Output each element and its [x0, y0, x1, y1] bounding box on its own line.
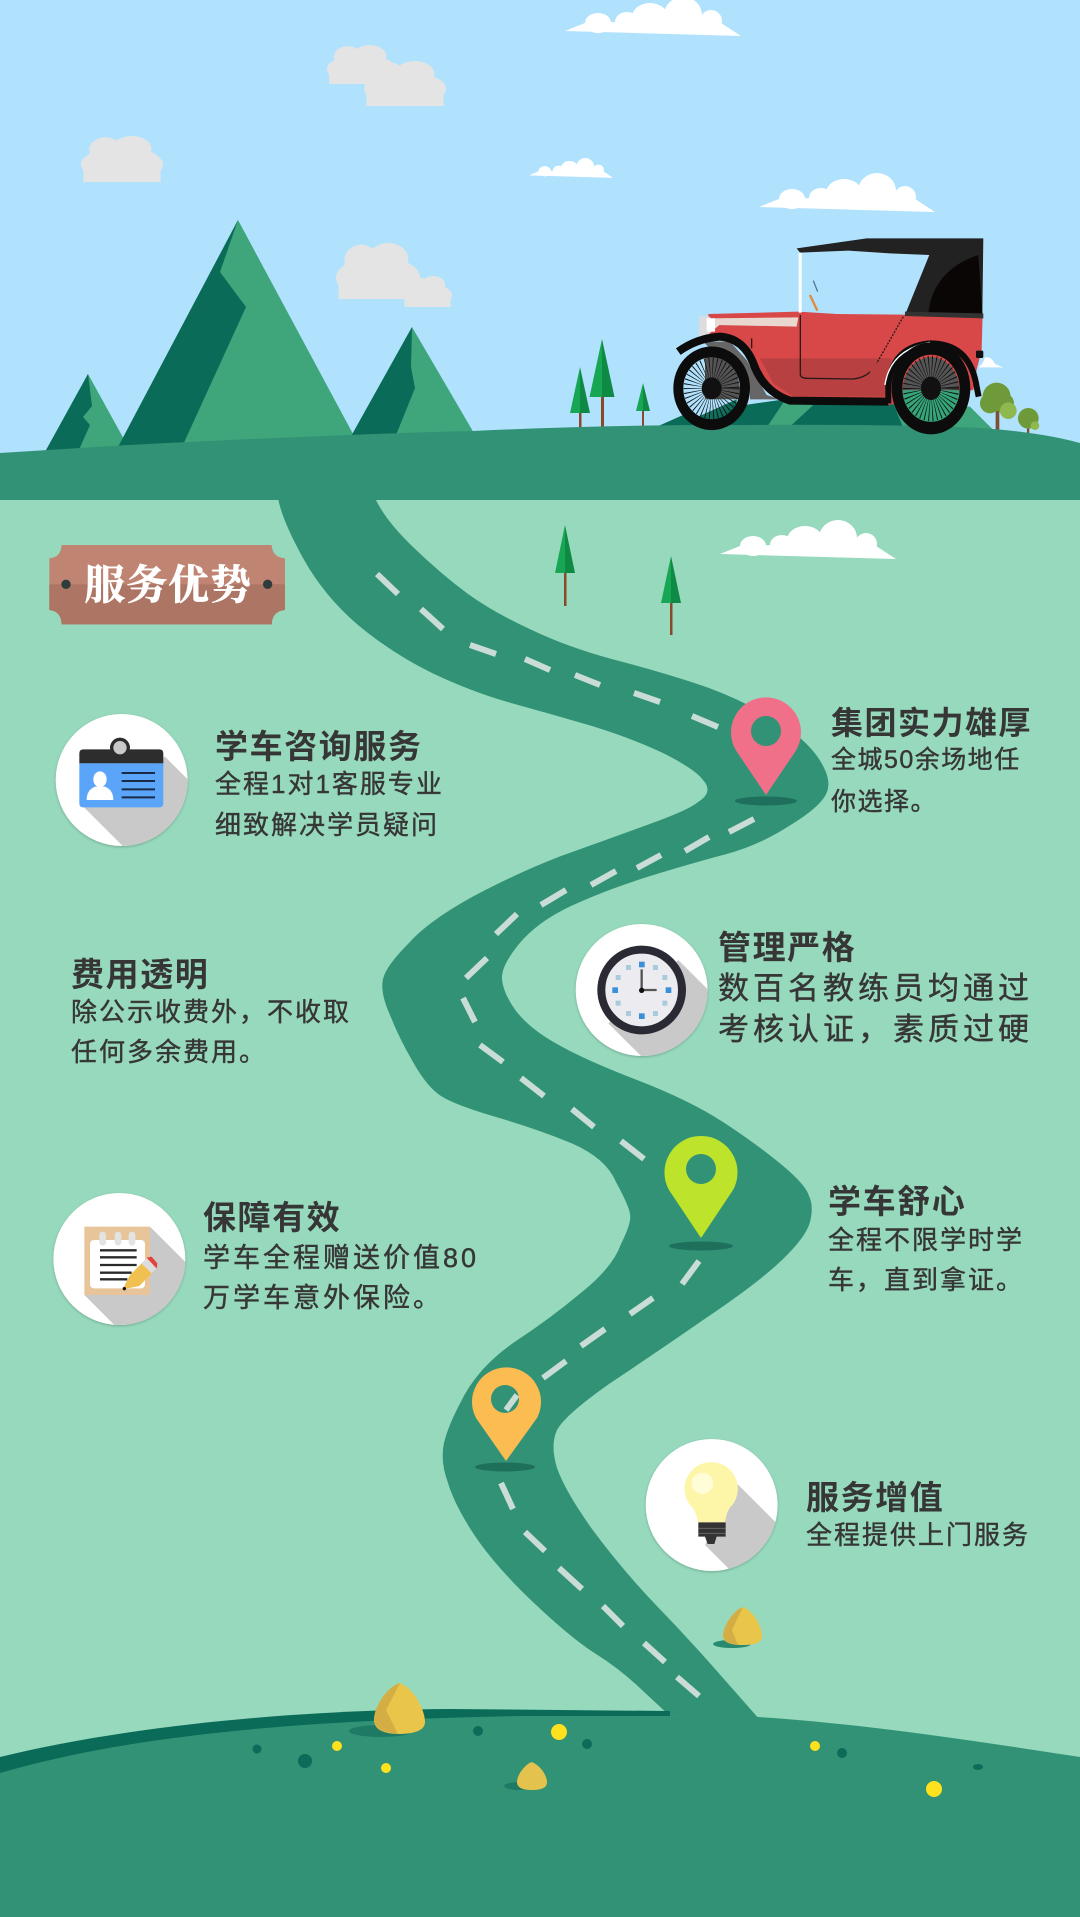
mountains	[45, 220, 478, 452]
winding road	[278, 498, 828, 1720]
text: 管理严格: 数百名教练员均通过	[718, 971, 1033, 1006]
car: convertible roof	[797, 238, 983, 317]
icon: light bulb	[644, 1439, 779, 1573]
round trees right of car	[980, 383, 1039, 433]
text: 费用透明	[71, 956, 351, 1067]
white cloud in meadow	[720, 520, 896, 559]
text: 管理严格: 管理严格	[718, 929, 856, 966]
car: belt line	[905, 312, 983, 318]
car: fenders	[678, 337, 979, 403]
car: tail light	[976, 351, 983, 358]
text: 集团实力雄厚	[831, 705, 1032, 816]
pines in meadow	[555, 525, 681, 635]
icon: clock	[574, 924, 709, 1058]
grey clouds in sky	[81, 45, 452, 307]
car: bonnet stripe and radiator	[699, 316, 798, 336]
car: door lines	[752, 315, 903, 379]
map pin: lime	[664, 1136, 737, 1250]
road centre dashes	[377, 574, 754, 1696]
text: 保障有效: 学车全程赠送价值80	[203, 1243, 479, 1273]
mint background	[0, 500, 1080, 1917]
icon: notepad and pencil	[52, 1193, 186, 1327]
text: 学车舒心: 车，直到拿证。	[828, 1265, 1024, 1295]
icon: id card	[54, 714, 189, 848]
text: 学车咨询服务: 细致解决学员疑问	[215, 810, 439, 840]
text: 管理严格	[718, 929, 1033, 1047]
banner: 服务优势	[49, 545, 285, 624]
car: windscreen post and steering wheel	[799, 253, 818, 313]
small pine trees on horizon	[570, 339, 650, 428]
text: 费用透明: 除公示收费外，不收取	[71, 997, 351, 1027]
text: 学车咨询服务: 全程1对1客服专业	[215, 769, 444, 799]
rock: small on ground	[504, 1762, 547, 1790]
text: 保障有效	[203, 1199, 479, 1313]
text: 服务增值	[806, 1479, 1030, 1550]
text: 费用透明: 费用透明	[71, 956, 209, 993]
text: 学车咨询服务	[215, 728, 444, 840]
car: underbody grey	[703, 342, 780, 399]
white clouds in sky	[529, 0, 935, 212]
text: 学车舒心: 学车舒心	[828, 1183, 966, 1220]
text: 集团实力雄厚: 集团实力雄厚	[831, 705, 1032, 741]
text: 集团实力雄厚: 全城50余场地任	[831, 746, 1021, 774]
text: 服务增值: 全程提供上门服务	[806, 1520, 1030, 1550]
rock: large on ridge	[349, 1683, 425, 1737]
ground dots	[252, 1724, 983, 1797]
sky background	[0, 0, 1080, 500]
car: lower body shade	[760, 358, 892, 397]
car: rear roof shade	[928, 255, 982, 313]
hill and cloud behind car	[653, 357, 1003, 432]
rock beside road	[713, 1607, 762, 1648]
text: 保障有效: 万学车意外保险。	[203, 1283, 443, 1313]
car: front wheel	[678, 352, 745, 425]
car: red body	[708, 312, 983, 405]
text: 集团实力雄厚: 你选择。	[831, 788, 937, 816]
map pin: pink	[731, 697, 801, 806]
text: 学车咨询服务: 学车咨询服务	[215, 728, 423, 765]
text: 学车舒心	[828, 1183, 1024, 1295]
top ground band	[0, 425, 1080, 500]
map pin: orange	[472, 1367, 541, 1472]
text: 服务增值: 服务增值	[806, 1479, 944, 1516]
banner: 服务优势: 服务优势	[84, 563, 252, 608]
car: rear wheel	[897, 349, 965, 428]
text: 学车舒心: 全程不限学时学	[828, 1225, 1024, 1255]
text: 管理严格: 考核认证，素质过硬	[718, 1012, 1033, 1047]
vintage red car	[678, 238, 983, 428]
bottom ground	[0, 1709, 1080, 1917]
text: 保障有效: 保障有效	[203, 1199, 341, 1236]
text: 费用透明: 任何多余费用。	[71, 1037, 267, 1067]
